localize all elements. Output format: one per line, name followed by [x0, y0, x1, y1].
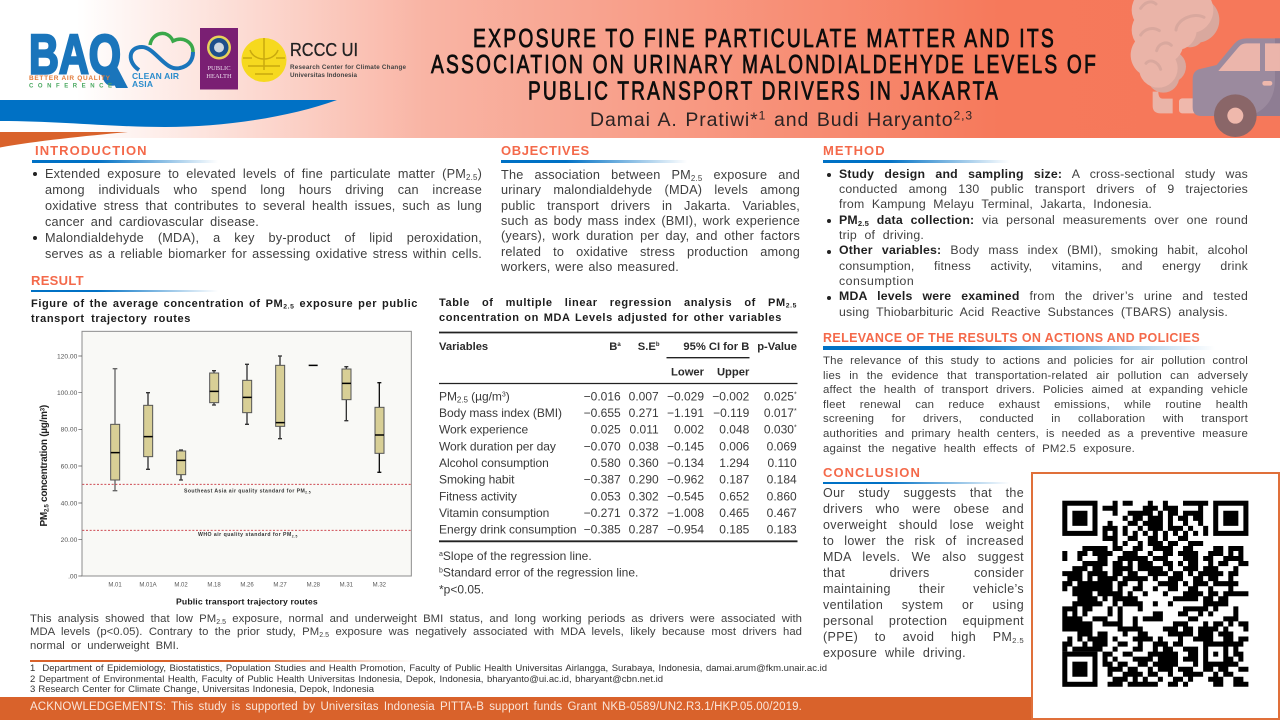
logo: Public Health: PUBLIC [207, 65, 231, 72]
table values: 0.048 [719, 423, 750, 437]
table values: 0.302 [629, 489, 659, 503]
table values: 0.053 [591, 489, 621, 503]
table footnotes: Standard error of the regression line. [443, 566, 638, 580]
table values: −1.191 [667, 406, 704, 420]
text block: introduction: oxidative stress that contributes to several health issues, such as lung [45, 198, 482, 212]
logo: BAQ: CONFERENCE [29, 84, 112, 90]
table values: * [794, 408, 797, 415]
box plot chart: M.01 [108, 583, 122, 589]
header banner [0, 0, 1280, 138]
text block: objectives [501, 168, 800, 274]
affiliations: 1 Department of Epidemiology, Biostatistics, Population Studies and Health Promotion, Faculty of Public Health Universitas Airlangga, Surabaya, Indonesia, damai.arum@fkm.unair.ac.id [30, 663, 827, 674]
table values: −0.954 [667, 523, 704, 537]
table variables: ) [506, 390, 510, 404]
table values: 0.467 [767, 506, 797, 520]
box plot chart: 40.00 [61, 500, 78, 507]
table values: 0.025 [764, 390, 794, 404]
text block: relevance: affect the health of transport drivers. Policies aimed at expanding vehicle [823, 384, 1248, 396]
table variables: Smoking habit [439, 473, 515, 487]
box plot chart: Southeast Asia air quality standard for PM [184, 488, 305, 494]
table values: 0.187 [719, 473, 750, 487]
table values: 0.069 [767, 439, 797, 453]
text block: method: PM2.5 data collection: via personal measurements over one round [839, 213, 1248, 227]
text block: conclusion [823, 486, 1024, 660]
text block: conclusion: to lower the risk of increased [823, 534, 1024, 548]
text block: objectives: related to oxidative stress production among [501, 245, 800, 259]
box plot chart: 100.00 [57, 390, 78, 397]
table footnotes: Slope of the regression line. [443, 549, 592, 563]
table values: 0.030 [764, 423, 794, 437]
heading: relevance: RELEVANCE OF THE RESULTS ON ACTIONS AND POLICIES [823, 331, 1200, 345]
box plot chart: 2.5 [292, 534, 297, 538]
logo: Universitas Indonesia seal and RCCC UI: Universitas Indonesia [290, 72, 357, 79]
table values: −0.387 [584, 473, 621, 487]
table values: 0.011 [630, 423, 659, 437]
logo: BAQ: BETTER AIR QUALITY [29, 75, 111, 82]
table values: 0.290 [629, 473, 659, 487]
table values: 0.580 [591, 456, 621, 470]
text block: conclusion: Our study suggests that the [823, 486, 1024, 500]
table values: 0.360 [629, 456, 659, 470]
table header: p-Value [757, 341, 797, 353]
table variables: Alcohol consumption [439, 456, 549, 470]
table values: −1.008 [667, 506, 704, 520]
table values: −0.070 [584, 439, 621, 453]
table values: 0.025 [591, 423, 621, 437]
illustration: car with exhaust smoke [1130, 0, 1280, 137]
table title: Table of multiple linear regression analysis of PM2.5 [439, 297, 797, 310]
text block: conclusion: MDA levels. We also suggest [823, 550, 1024, 564]
table header: S.E [638, 341, 656, 353]
text block: objectives: (years), work duration per day, and other factors [501, 229, 800, 243]
text block: objectives: urinary malondialdehyde (MDA) levels among [501, 183, 800, 197]
table values: −0.145 [667, 439, 704, 453]
box plot chart: M.02 [174, 583, 188, 589]
logo: Public Health: HEALTH [206, 73, 232, 80]
table values: −0.271 [584, 506, 621, 520]
text block: method: conducted among 130 public transport drivers of 9 trajectories [839, 182, 1248, 196]
text block: conclusion: drivers who were obese and [823, 502, 1024, 516]
figure title [31, 298, 418, 325]
table values: 0.110 [768, 456, 797, 470]
table values: −0.016 [584, 390, 621, 404]
text block: introduction [33, 166, 482, 260]
text block: relevance: The relevance of this study to actions and policies for air pollution control [823, 355, 1248, 367]
box plot chart: M.27 [273, 583, 287, 589]
table variables: Energy drink consumption [439, 523, 577, 537]
logo: Clean Air Asia: ASIA [132, 79, 153, 89]
text block: introduction: among individuals who spend long hours driving can increase [45, 182, 482, 196]
text block: objectives: workers, were also measured. [501, 260, 679, 274]
table values [584, 390, 797, 537]
table header: B [609, 341, 617, 353]
figure title: Figure of the average concentration of PM2.5 exposure per public [31, 298, 418, 311]
table values: −0.385 [584, 523, 621, 537]
table variables: Body mass index (BMI) [439, 406, 562, 420]
box plot chart: concentration (µg/m [39, 411, 50, 504]
logo: Universitas Indonesia seal and RCCC UI: RCCC UI [290, 40, 358, 60]
box plot chart: PM [39, 512, 50, 526]
box plot chart: ) [39, 405, 50, 408]
text block: method: Other variables: Body mass index (BMI), smoking habit, alcohol [839, 243, 1248, 257]
table values: 0.038 [629, 439, 659, 453]
table values: 0.860 [767, 489, 797, 503]
table footnotes: a [439, 551, 443, 558]
table values: −0.029 [667, 390, 704, 404]
box plot chart: .00 [68, 573, 78, 580]
box plot chart: 60.00 [61, 463, 78, 470]
table values: 0.006 [719, 439, 750, 453]
text block: relevance: screening for drivers, conducted in collaboration with transport [823, 413, 1248, 425]
box plot chart: Public transport trajectory routes [176, 596, 318, 606]
heading: conclusion: CONCLUSION [823, 465, 921, 480]
table values: −0.134 [667, 456, 704, 470]
text block: relevance [823, 355, 1248, 455]
box plot chart: M.26 [240, 583, 254, 589]
table values: 0.652 [719, 489, 750, 503]
table variables: 3 [502, 392, 506, 398]
table header: 95% CI for B [683, 341, 749, 353]
text block: result interpretation: MDA levels (p<0.05). Contrary to the prior study, PM2.5 exposure was negatively associated with MDA levels, likely because most drivers had [30, 626, 802, 639]
box plot chart: M.32 [373, 583, 387, 589]
decorative swooshes [0, 100, 337, 148]
box plot chart: 20.00 [61, 537, 78, 544]
table values: 0.002 [674, 423, 704, 437]
text block: objectives: public transport drivers in Jakarta. Variables, [501, 199, 800, 213]
text block: relevance: against the negative health effects of PM2.5 exposure. [823, 443, 1135, 455]
table variables [439, 390, 577, 537]
box plot chart: WHO air quality standard for PM [198, 532, 291, 538]
table values: −0.545 [667, 489, 704, 503]
affiliations [30, 663, 827, 695]
heading: objectives: OBJECTIVES [501, 143, 590, 158]
table values: −0.119 [713, 406, 750, 420]
box plot chart: 120.00 [57, 353, 78, 360]
table footnotes: b [439, 568, 443, 575]
box plot chart [39, 330, 412, 606]
table header: b [656, 342, 660, 348]
table values: 0.372 [629, 506, 659, 520]
table values: * [794, 425, 797, 432]
text block: conclusion: (PPE) to avoid high PM2.5 [823, 630, 1024, 645]
table values: 0.183 [767, 523, 797, 537]
box plot chart: M.31 [340, 583, 354, 589]
text block: conclusion: maintaining their vehicle’s [823, 582, 1024, 596]
text block: conclusion: that drivers consider [823, 566, 1024, 580]
acknowledgements bar [0, 697, 1280, 720]
table values: 0.017 [764, 406, 794, 420]
table values: 0.465 [719, 506, 750, 520]
text block: relevance: fleet renewal can reduce exhaust emissions, while routine health [823, 399, 1248, 411]
acknowledgements bar: ACKNOWLEDGEMENTS: This study is supported by Universitas Indonesia PITTA-B support funds Grant NKB-0589/UN2.R3.1/HKP.05.00/2019. [30, 701, 802, 713]
table variables: Work duration per day [439, 439, 556, 453]
table values: 1.294 [719, 456, 750, 470]
text block: conclusion: personal protection equipment [823, 614, 1024, 628]
text block: introduction: Extended exposure to elevated levels of fine particulate matter (PM2.5) [45, 166, 482, 181]
text block: method: trip of driving. [839, 228, 924, 242]
box plot chart: 3 [40, 407, 46, 411]
logo: Clean Air Asia: CLEAN AIR [132, 71, 179, 81]
table title: concentration on MDA Levels adjusted for other variables [439, 312, 782, 324]
text block: introduction: Malondialdehyde (MDA), a key by-product of lipid peroxidation, [45, 230, 482, 244]
text block: method: MDA levels were examined from the driver’s urine and tested [839, 289, 1248, 303]
table variables: Work experience [439, 423, 528, 437]
box plot chart: 80.00 [61, 427, 78, 434]
box plot chart: 2.5 [45, 504, 51, 512]
table title [439, 297, 797, 324]
table header: a [617, 342, 621, 348]
table header: Variables [439, 341, 488, 353]
text block: conclusion: overweight should lose weight [823, 518, 1024, 532]
table variables: Vitamin consumption [439, 506, 549, 520]
table values: −0.655 [584, 406, 621, 420]
text block: method [827, 167, 1248, 319]
text block: method: consumption [839, 274, 914, 288]
logo: Universitas Indonesia seal and RCCC UI [242, 38, 406, 82]
heading: result: RESULT [31, 273, 84, 288]
logo: Universitas Indonesia seal and RCCC UI: Research Center for Climate Change [290, 64, 406, 71]
table footnotes [439, 549, 638, 596]
affiliations: 3 Research Center for Climate Change, Universitas Indonesia, Depok, Indonesia [30, 684, 374, 695]
figure title: transport trajectory routes [31, 313, 191, 325]
text block: conclusion: exposure while driving. [823, 646, 966, 660]
box plot chart: M.01A [139, 583, 157, 589]
logo: Public Health [200, 28, 238, 90]
regression table [439, 332, 798, 596]
table header: Upper [717, 366, 750, 378]
table variables: 2.5 [457, 396, 468, 404]
heading: method: METHOD [823, 143, 886, 158]
text block: objectives: such as body mass index (BMI), work experience [501, 214, 800, 228]
text block: relevance: authorities and primary health centers, is needed as a preventive measure [823, 428, 1248, 440]
text block: introduction: cancer and cardiovascular disease. [45, 214, 259, 228]
table header: Lower [671, 366, 705, 378]
QR code panel [1031, 472, 1280, 720]
table variables: (µg/m [468, 390, 502, 404]
text block: method: using Thiobarbituric Acid Reactive Substances (TBARS) analysis. [839, 305, 1228, 319]
authors: Damai A. Pratiwi*1 and Budi Haryanto2,3 [590, 108, 973, 131]
box plot chart: 2.5 [305, 491, 311, 495]
heading: introduction: INTRODUCTION [35, 143, 148, 158]
table values: 0.185 [719, 523, 750, 537]
text block: conclusion: ventilation system or using [823, 598, 1024, 612]
text block: result interpretation: normal or underweight BMI. [30, 640, 179, 652]
table values: 0.184 [767, 473, 797, 487]
text block: method: consumption, fitness activity, vitamins, and energy drink [839, 259, 1248, 273]
text block: introduction: serves as a reliable biomarker for assessing oxidative stress within cells. [45, 246, 482, 260]
text block: method: Study design and sampling size: A cross-sectional study was [839, 167, 1248, 181]
text block: result interpretation [30, 613, 802, 652]
box plot chart: M.28 [307, 583, 321, 589]
text block: method: from Kampung Melayu Terminal, Jakarta, Indonesia. [839, 197, 1152, 211]
table footnotes: *p<0.05. [439, 582, 484, 596]
table values: −0.962 [667, 473, 704, 487]
table variables: Fitness activity [439, 489, 517, 503]
table variables: PM [439, 390, 457, 404]
table values: −0.002 [712, 390, 750, 404]
divider above affiliations [30, 660, 415, 662]
table values: 0.007 [629, 390, 659, 404]
title [430, 23, 1098, 105]
text block: relevance: lies in the evidence that transportation-related air pollution can adversely [823, 370, 1248, 382]
box plot chart: M.18 [207, 583, 221, 589]
table values: * [794, 392, 797, 398]
table header [439, 341, 797, 378]
text block: objectives: The association between PM2.5 exposure and [501, 168, 800, 183]
text block: result interpretation: This analysis showed that low PM2.5 exposure, normal and underweight BMI status, and long working periods as drivers were associated with [30, 613, 802, 626]
table values: 0.271 [629, 406, 659, 420]
table values: 0.287 [629, 523, 659, 537]
logo: Clean Air Asia [128, 32, 195, 89]
affiliations: 2 Department of Environmental Health, Faculty of Public Health Universitas Indonesia, Depok, Indonesia, bharyanto@ui.ac.id, bharyant@cbn.net.id [30, 674, 663, 684]
